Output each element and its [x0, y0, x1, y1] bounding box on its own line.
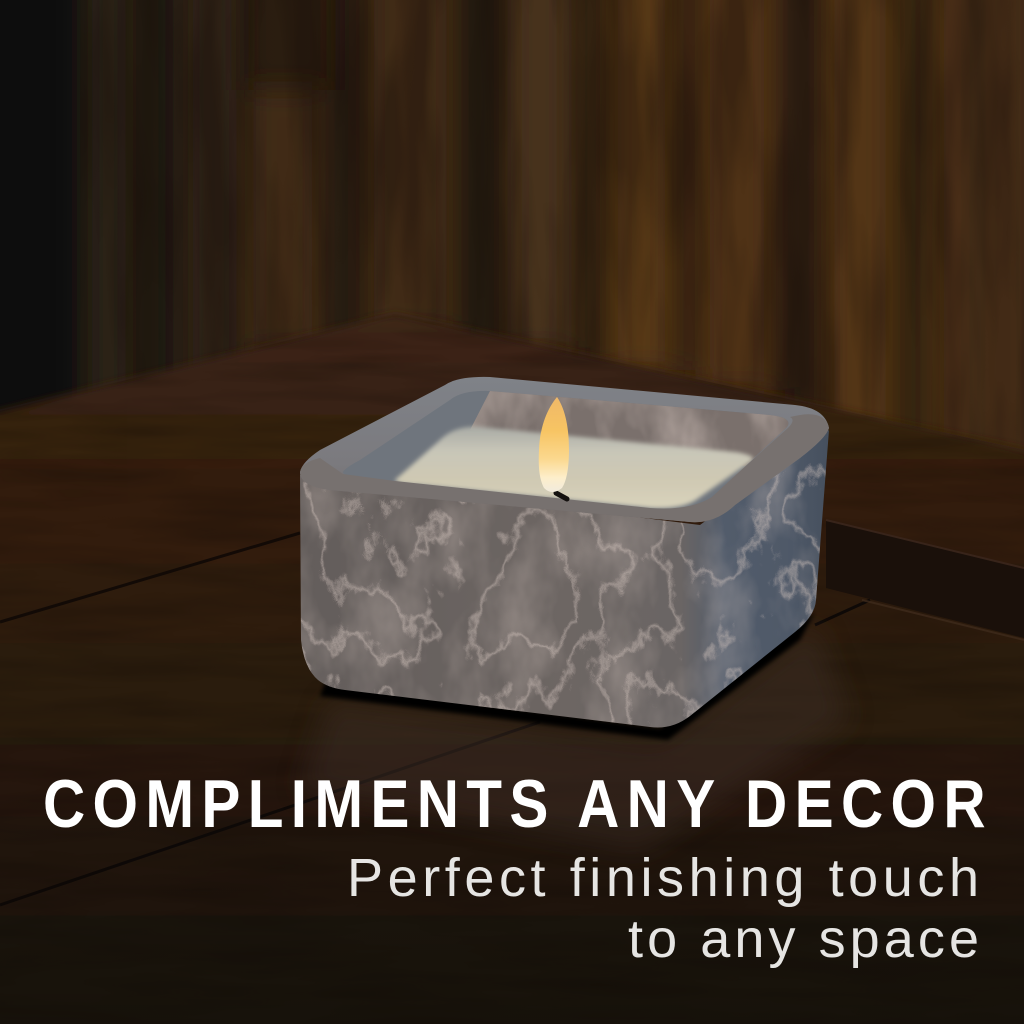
- subheading line 1: Perfect finishing touch: [347, 848, 979, 908]
- wick: [556, 493, 567, 499]
- candle: marble square vessel: [300, 377, 829, 740]
- subheading line 2: to any space: [628, 909, 979, 969]
- vessel top rim: [300, 377, 829, 522]
- front rim band: [300, 414, 829, 522]
- contact shadow: [320, 612, 815, 740]
- wax surface: [395, 427, 753, 508]
- blurred wood wall background: [0, 0, 1024, 480]
- headline: COMPLIMENTS ANY DECOR: [43, 767, 986, 842]
- dark wooden table: [0, 310, 1024, 1024]
- inner wall: [343, 391, 788, 510]
- flame: [539, 397, 569, 492]
- marbled back wall: [470, 391, 788, 466]
- vessel outer body: [300, 430, 829, 728]
